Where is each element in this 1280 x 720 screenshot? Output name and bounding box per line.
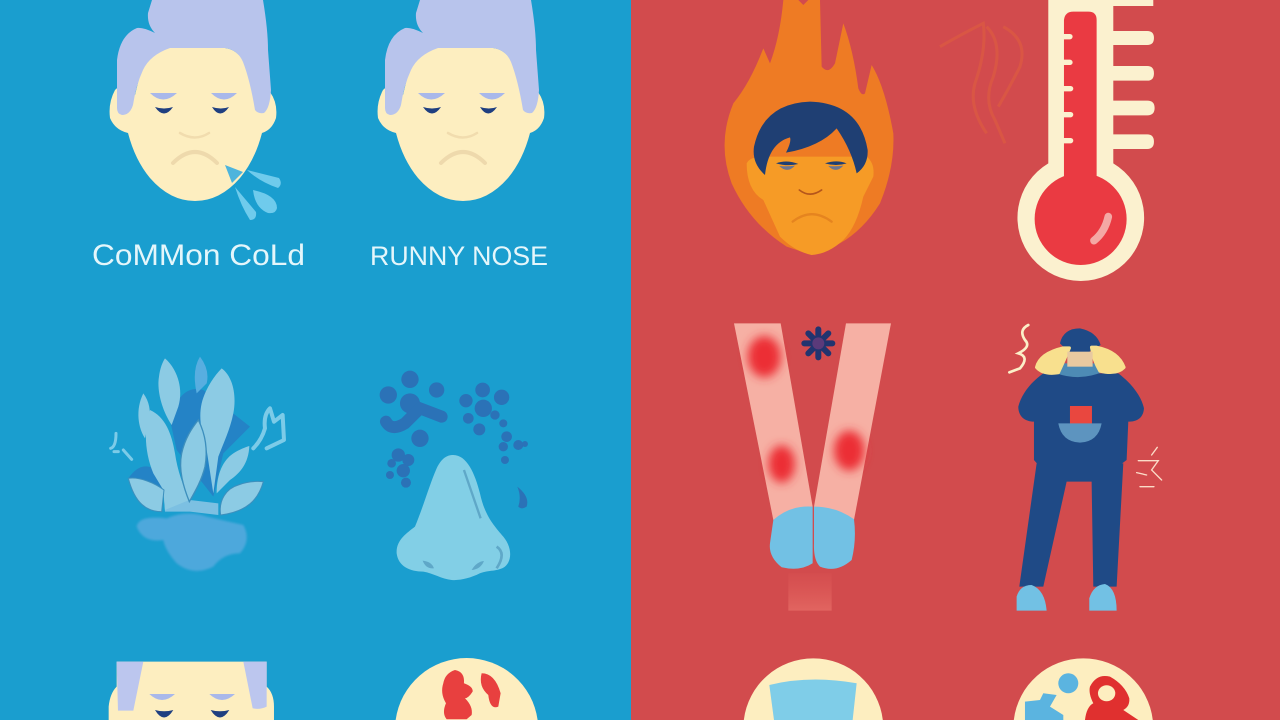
sore spots [748,336,865,483]
shiver marks [1009,325,1028,372]
icon: runny nose face [378,0,544,201]
icon: shivering person [1009,325,1162,611]
icon: heat waves [940,23,1022,143]
icon: sneeze droplets [225,165,281,220]
legs [1019,463,1123,587]
icon: aching legs [734,323,891,611]
virus icon [804,329,832,357]
icon: head in flames [725,0,893,255]
pollen clusters [380,371,528,508]
icon: throat circle with red patches [396,658,538,720]
icon: thermometer [1017,0,1155,281]
icon: sneezing face [110,0,281,220]
icon: circle with germs [1014,658,1153,720]
red phone [1070,406,1092,426]
body [1018,373,1144,465]
hood [1060,328,1101,353]
leg fade reflection [788,573,832,611]
icon: nose with pollen [380,371,528,580]
hair [754,102,868,175]
pocket [1058,423,1102,443]
label: common cold: CoMMon CoLd [92,239,305,272]
icon: circle with blue shape [744,658,883,720]
blue socks [770,506,813,569]
hands on face [1037,348,1069,373]
nose shape [397,455,510,580]
icon: allergen plant [111,357,284,571]
panel: common cold background [0,0,631,720]
panel: flu background [631,0,1280,720]
icon: face cropped at bottom [109,662,274,720]
shoes [1017,585,1047,611]
label: runny nose: RUNNY NOSE [370,241,548,271]
